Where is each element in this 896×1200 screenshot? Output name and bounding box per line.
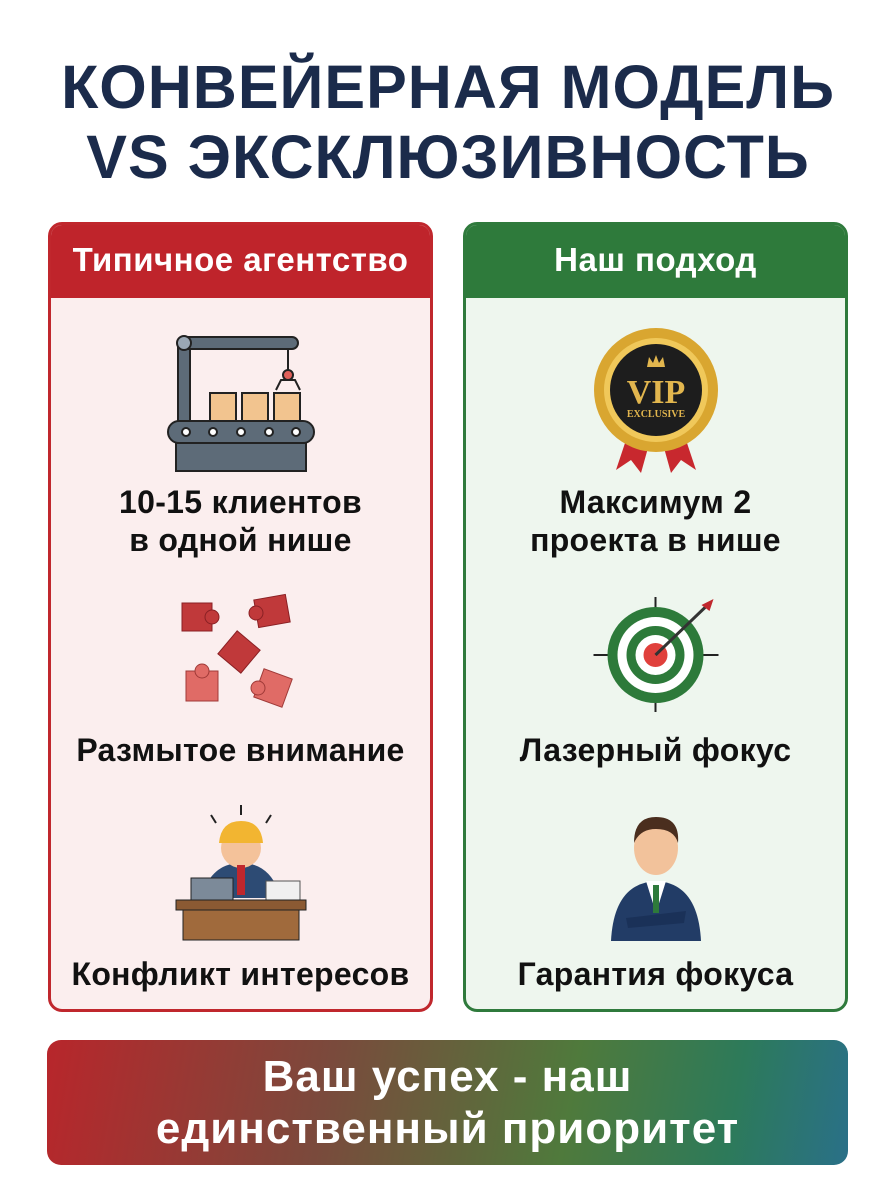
- header: our approach: Наш подход: [554, 241, 757, 278]
- text: max 2: Максимум 2: [560, 484, 751, 520]
- text: conflict: Конфликт интересов: [72, 956, 410, 992]
- icon: conveyor: [167, 335, 315, 472]
- icon: VIP badge: [594, 328, 718, 473]
- header: typical agency: Типичное агентство: [73, 241, 408, 278]
- title: VS ЭКСКЛЮЗИВНОСТЬ: [86, 123, 810, 191]
- icon: target: [594, 597, 718, 712]
- bottom banner: единственный приоритет: [156, 1104, 739, 1153]
- text: max 2: проекта в нише: [530, 522, 781, 558]
- header: our approach: [463, 222, 848, 298]
- panel: our approach: [463, 222, 848, 1012]
- bottom banner: Ваш успех - наш: [263, 1052, 632, 1101]
- text: laser focus: Лазерный фокус: [520, 732, 791, 768]
- title: КОНВЕЙЕРНАЯ МОДЕЛЬ: [61, 53, 835, 121]
- text: guarantee: Гарантия фокуса: [518, 956, 793, 992]
- title: [61, 52, 835, 191]
- text: clients: в одной нише: [129, 522, 352, 558]
- icon: VIP badge: EXCLUSIVE: [626, 409, 685, 420]
- bottom banner: [47, 1040, 848, 1165]
- header: typical agency: [48, 222, 433, 298]
- panel: typical agency: [48, 222, 433, 1012]
- text: max 2: [530, 484, 781, 558]
- icon: puzzles: [182, 594, 293, 708]
- text: clients: 10-15 клиентов: [119, 484, 362, 520]
- icon: VIP badge: VIP: [626, 374, 685, 411]
- text: blurred attention: Размытое внимание: [76, 732, 405, 768]
- text: clients: [119, 484, 362, 558]
- icon: stressed worker: [176, 805, 306, 940]
- icon: businessman: [611, 817, 701, 941]
